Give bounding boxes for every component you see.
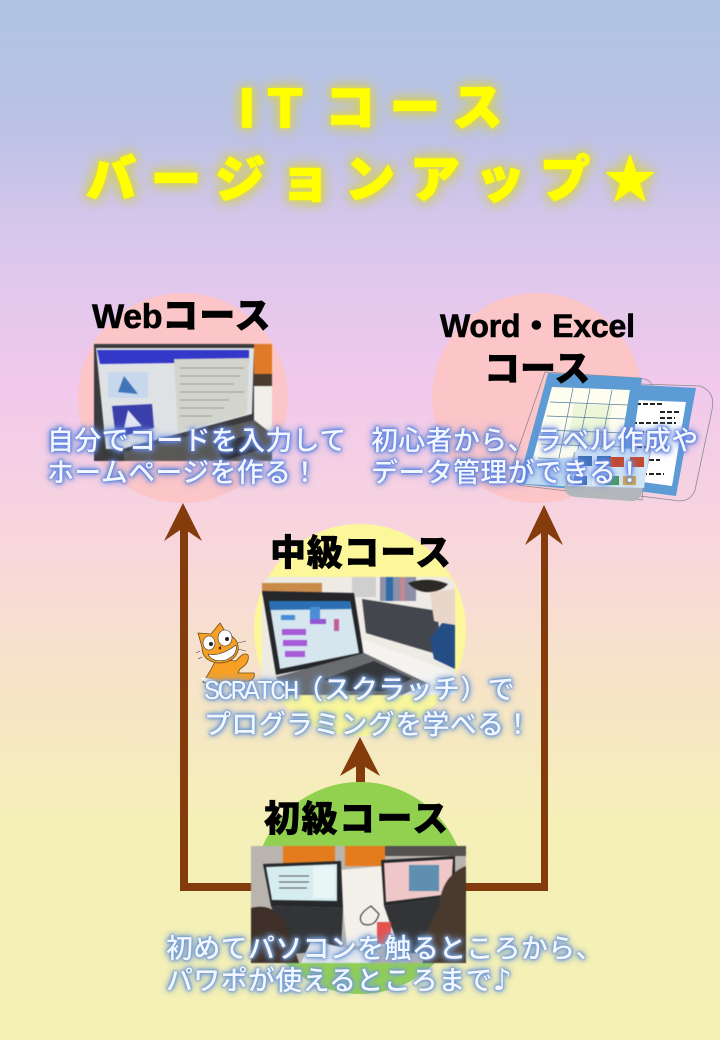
circle: intermediate course background bbox=[254, 524, 466, 736]
text: intermediate course description bbox=[200, 672, 532, 742]
icon: Word and Excel software package bbox=[510, 372, 714, 502]
heading: intermediate course: 中級コース bbox=[270, 532, 452, 573]
text: beginner course description bbox=[162, 930, 603, 998]
circle: Word and Excel course background bbox=[432, 293, 642, 503]
text: Word and Excel course description: データ管理ができる！ bbox=[371, 458, 643, 488]
circle: Web course background bbox=[78, 293, 288, 503]
heading: Word and Excel course bbox=[440, 308, 635, 389]
icon: Scratch cat bbox=[196, 622, 255, 684]
circle: beginner course background bbox=[254, 782, 466, 994]
title: IT course version up bbox=[78, 74, 670, 214]
photo: laptop running Scratch bbox=[261, 576, 456, 696]
heading: beginner course: 初級コース bbox=[264, 798, 450, 839]
title: IT course version up: コース bbox=[325, 80, 518, 136]
text: Word and Excel course description: 初心者から、ラベル作成や bbox=[371, 426, 699, 456]
text: Word and Excel course description bbox=[366, 421, 702, 490]
text: intermediate course description: SCRATCH（スクラッチ）で bbox=[204, 675, 515, 708]
heading: Word and Excel course: Word・Excel bbox=[440, 308, 635, 344]
photo: children using laptops bbox=[250, 845, 467, 964]
text: Web course description: 自分でコードを入力して bbox=[47, 426, 346, 456]
title: IT course version up: I bbox=[239, 76, 255, 139]
text: beginner course description: 初めてパソコンを触るところから、 bbox=[166, 934, 603, 964]
text: beginner course description: パワポが使えるところまで♪ bbox=[166, 963, 512, 998]
text: Web course description bbox=[44, 422, 348, 490]
photo: laptop showing web page code bbox=[93, 343, 273, 462]
text: Web course description: ホームページを作る！ bbox=[47, 458, 319, 488]
heading: Web course: Webコース bbox=[92, 295, 271, 336]
title: IT course version up: T bbox=[268, 76, 302, 139]
heading: Word and Excel course: コース bbox=[484, 348, 590, 389]
text: intermediate course description: プログラミングを学べる！ bbox=[204, 710, 532, 740]
title: IT course version up: バージョンアップ★ bbox=[86, 152, 670, 208]
